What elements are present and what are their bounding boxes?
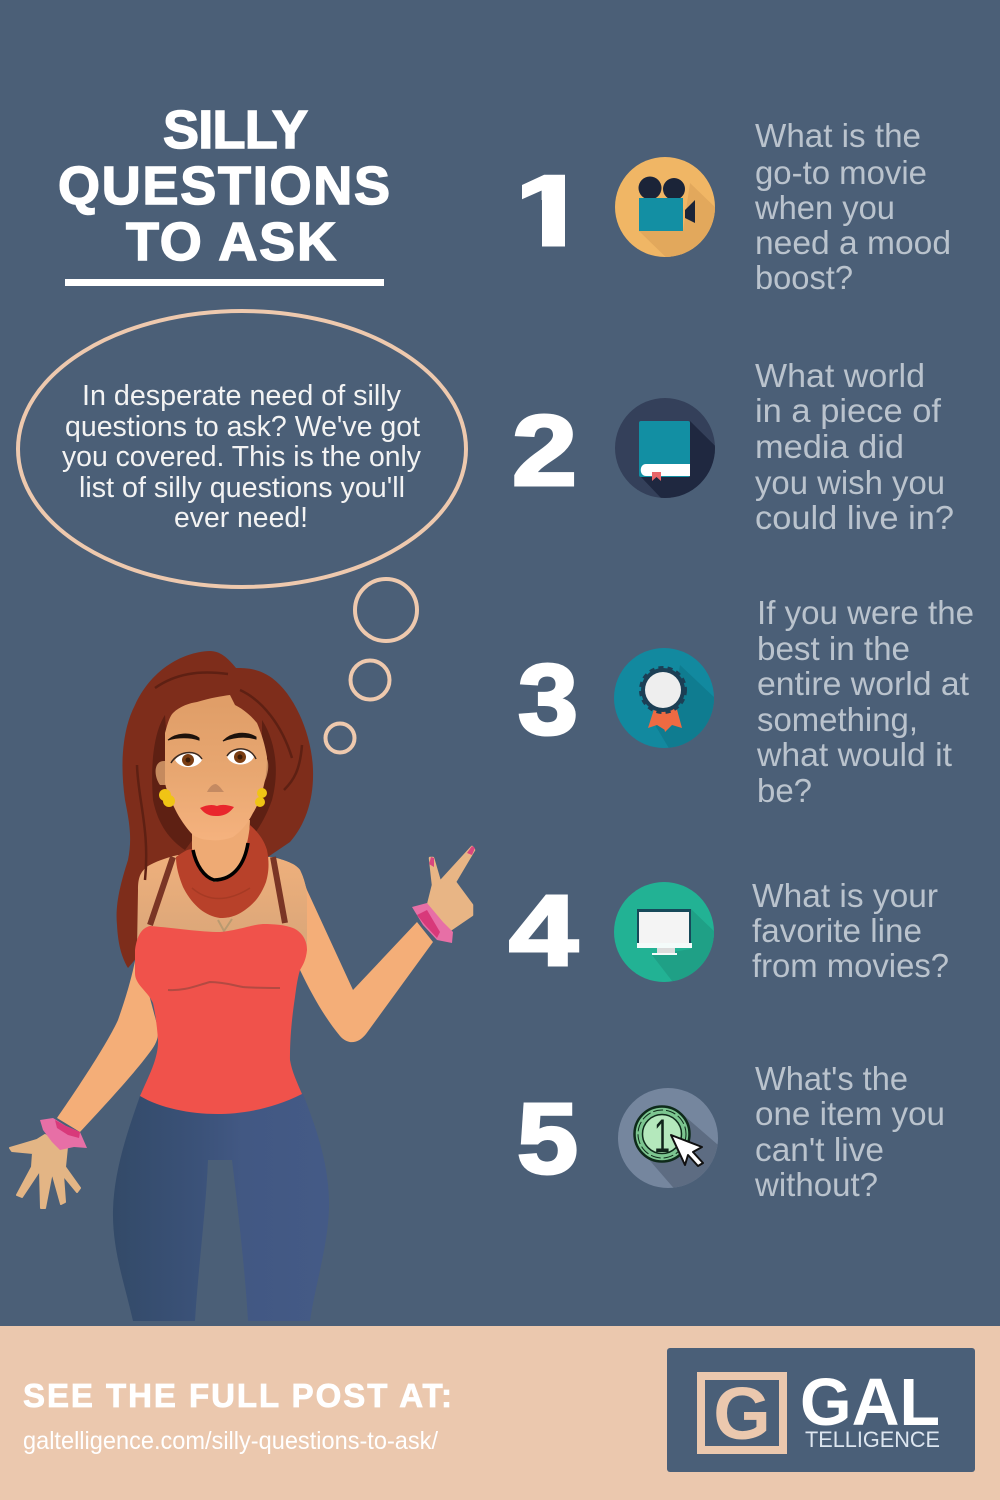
question 1 [754, 117, 951, 296]
left hand [10, 1135, 80, 1208]
right fingernails [429, 846, 475, 867]
hair back [117, 651, 313, 968]
number 2: 2 [512, 395, 577, 507]
question 3: best in the [757, 630, 910, 667]
question 1: boost? [755, 259, 853, 296]
top [135, 924, 307, 1114]
icon: medal [614, 648, 714, 748]
left wristband [40, 1118, 87, 1150]
icon: coin and cursor: 1 [654, 1109, 670, 1162]
bubble text: ever need! [174, 502, 308, 534]
question 3: something, [757, 701, 918, 738]
icon: coin and cursor [618, 1088, 718, 1188]
halter straps [150, 857, 285, 925]
thought bubble [18, 311, 466, 752]
title: TO ASK [126, 212, 336, 272]
footer heading: SEE THE FULL POST AT: [23, 1377, 452, 1414]
number 1: 1 [511, 155, 589, 267]
eyebrows [168, 733, 256, 741]
face [165, 695, 267, 840]
pants [113, 1094, 329, 1321]
number 3: 3 [518, 644, 578, 756]
logo: GAL [800, 1365, 940, 1440]
earrings [159, 788, 267, 807]
bubble text [62, 380, 421, 534]
question 5: one item you [755, 1095, 945, 1132]
eyes [175, 753, 202, 767]
question 5: What's the [755, 1060, 908, 1097]
question 4: favorite line [752, 912, 922, 949]
logo: G [713, 1372, 771, 1455]
bubble text: you covered. This is the only [62, 441, 421, 473]
question 3: entire world at [757, 665, 969, 702]
question 5: without? [754, 1166, 878, 1203]
footer panel [0, 1326, 1000, 1500]
question 2: What world [755, 357, 925, 394]
title [58, 100, 390, 272]
footer url: galtelligence.com/silly-questions-to-ask/ [23, 1427, 438, 1455]
chest [137, 855, 307, 960]
right hand [428, 847, 474, 930]
logo: TELLIGENCE [805, 1427, 940, 1452]
top seam [168, 982, 280, 990]
scarf folds [192, 888, 250, 898]
bubble text: questions to ask? We've got [65, 411, 420, 443]
title: QUESTIONS [58, 156, 390, 216]
title: SILLY [163, 100, 308, 160]
nose [207, 784, 224, 792]
bubble text: In desperate need of silly [82, 380, 401, 412]
question 1: need a mood [755, 224, 951, 261]
question 1: What is the [755, 117, 921, 154]
hair shadow by face [152, 715, 276, 850]
question 3: be? [757, 772, 812, 809]
question 2: in a piece of [755, 392, 942, 429]
logo [667, 1348, 975, 1472]
question 4: from movies? [752, 947, 949, 984]
question 4 [752, 877, 949, 984]
scarf inner shadow [193, 843, 248, 880]
number 4: 4 [509, 875, 578, 987]
question 3 [756, 594, 974, 809]
question 3: If you were the [757, 594, 974, 631]
question 4: What is your [752, 877, 938, 914]
question 1: go-to movie [755, 154, 927, 191]
scarf [176, 825, 269, 918]
right wristband [412, 903, 453, 943]
question 2: media did [755, 428, 904, 465]
question 2 [755, 357, 954, 536]
neck [192, 820, 250, 880]
question 2: could live in? [755, 499, 954, 536]
question 5 [754, 1060, 945, 1203]
question 3: what would it [756, 736, 952, 773]
bubble text: list of silly questions you'll [79, 472, 405, 504]
left arm [57, 950, 158, 1132]
icon: monitor [614, 882, 714, 982]
question 2: you wish you [755, 464, 945, 501]
ears [156, 755, 268, 785]
lips [200, 805, 234, 816]
icon: movie camera [615, 157, 715, 257]
right arm [272, 857, 433, 1042]
hair streaks [137, 673, 302, 880]
question 5: can't live [755, 1131, 884, 1168]
illustration: woman pointing [10, 651, 475, 1321]
necklace [218, 919, 232, 945]
title underline [65, 279, 384, 286]
question 1: when you [754, 189, 895, 226]
number 5: 5 [517, 1083, 578, 1195]
icon: book [615, 398, 715, 498]
